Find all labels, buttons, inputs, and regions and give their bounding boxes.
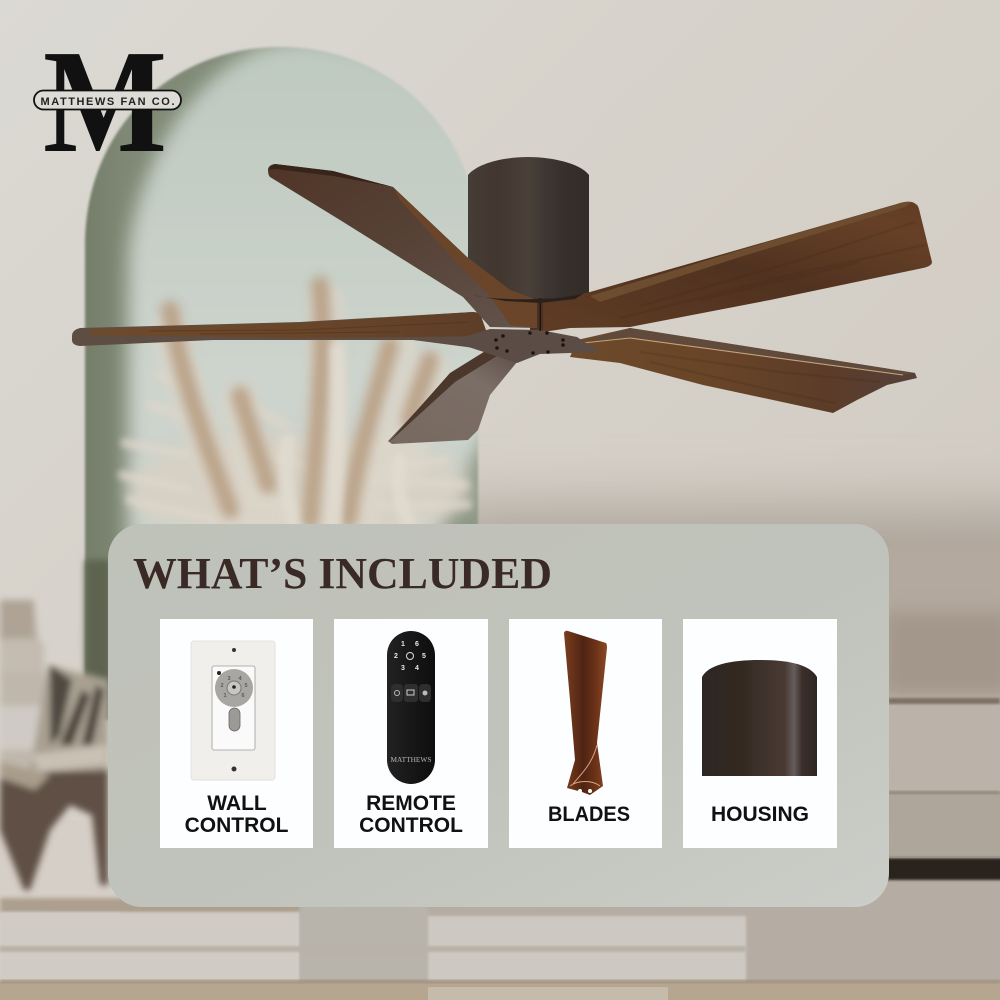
icon: remote: 1 <box>401 641 405 648</box>
icon: wall plate: 5 <box>244 683 248 689</box>
label: HOUSING <box>711 803 809 826</box>
icon: wall plate: 3 <box>227 676 231 682</box>
icon: remote: MATTHEWS <box>390 755 432 764</box>
ceiling fan <box>72 157 932 444</box>
icon: wall plate: 6 <box>241 693 245 699</box>
hub plate with screws <box>450 293 600 363</box>
background: sofa on the right <box>880 545 1000 880</box>
label: CONTROL <box>359 814 463 837</box>
label: CONTROL <box>185 814 289 837</box>
background: armchair and throw on the left <box>0 560 110 890</box>
icon: remote: 4 <box>415 665 419 672</box>
hub wedge behind blades <box>530 298 548 334</box>
icon: remote: 5 <box>422 653 426 660</box>
pampas grass <box>122 285 470 545</box>
icon: wood blade <box>564 631 607 795</box>
background: green arched niche with pampas grass <box>85 40 510 725</box>
left blade <box>72 312 490 350</box>
icon: remote: 6 <box>415 641 419 648</box>
label: BLADES <box>548 803 630 826</box>
icon: housing cylinder <box>702 660 817 776</box>
icon: wall plate: 4 <box>238 676 242 682</box>
logo: Matthews Fan Co.: MATTHEWS FAN CO. <box>40 96 174 108</box>
front blade <box>388 350 517 444</box>
panel: what's included <box>108 524 889 907</box>
card: remote control <box>334 619 488 848</box>
logo: Matthews Fan Co.: M <box>43 20 167 184</box>
icon: remote <box>387 631 435 784</box>
icon: wall plate <box>191 641 275 780</box>
upper-left blade <box>268 164 537 328</box>
icon: remote: 2 <box>394 653 398 660</box>
icon: remote: 3 <box>401 665 405 672</box>
card: housing <box>683 619 837 848</box>
icon: wall plate: 1 <box>223 693 227 699</box>
fan housing <box>468 157 589 299</box>
label: WALL <box>207 792 267 815</box>
heading: WHAT’S INCLUDED <box>133 549 552 598</box>
upper-right blade <box>543 202 932 332</box>
background: floor with window light <box>0 820 1000 1000</box>
card: wall control <box>160 619 313 848</box>
label: REMOTE <box>366 792 456 815</box>
icon: wall plate: 2 <box>220 683 224 689</box>
lower-right blade <box>570 328 917 413</box>
card: blades <box>509 619 662 848</box>
